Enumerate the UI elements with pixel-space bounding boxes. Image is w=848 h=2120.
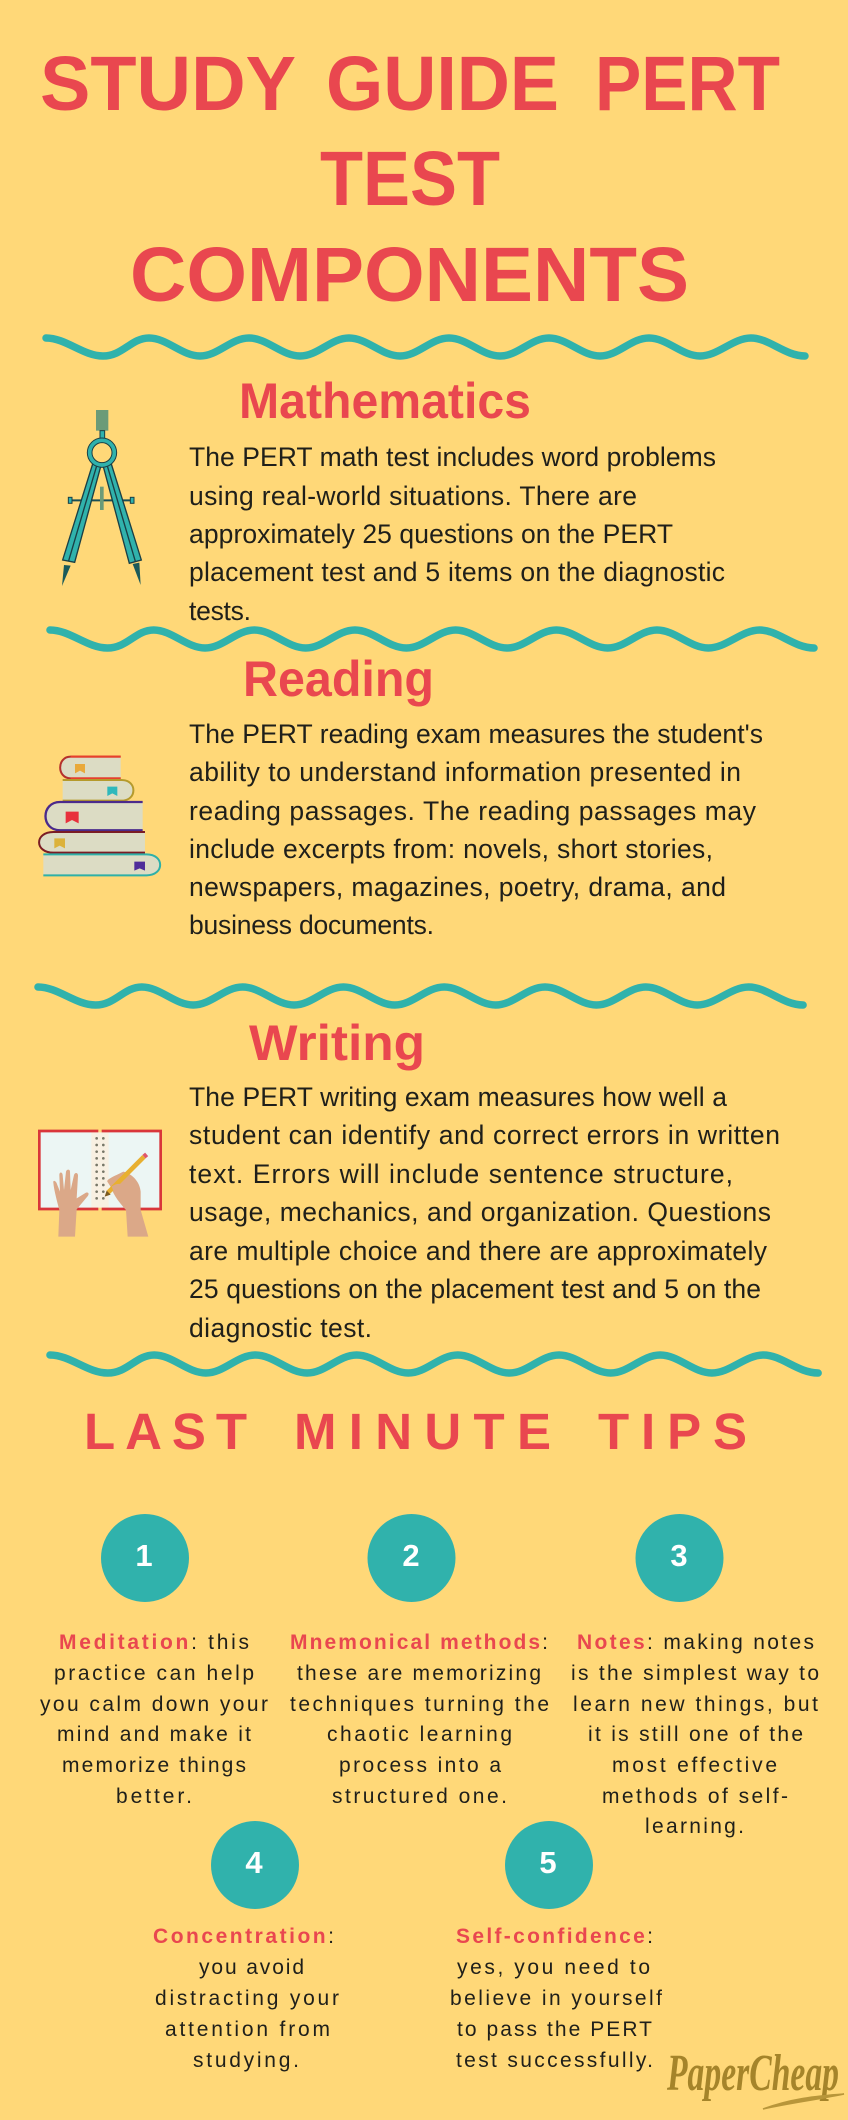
tip 4: concentration (153, 1821, 339, 2072)
text: reading description: newspapers, magazines, poetry, drama, and (189, 872, 726, 902)
number badge 4 (211, 1821, 299, 1909)
text: writing description: 25 questions on the placement test and 5 on the (189, 1274, 761, 1304)
text: mathematics description: placement test and 5 items on the diagnostic (189, 557, 725, 587)
heading: writing: Writing (249, 1015, 425, 1071)
text: reading description: The PERT reading exam measures the student's (189, 719, 763, 749)
tip 5 text: Self-confidence: (456, 1925, 653, 1948)
tip 4 text: attention from (165, 2018, 330, 2041)
number badge 2 (368, 1514, 456, 1602)
tip 2 text: process into a (339, 1754, 501, 1777)
title: STUDY (40, 41, 296, 127)
number badge 1 (101, 1514, 189, 1602)
wave divider 1 (46, 338, 805, 356)
tip 2: mnemonical methods (290, 1514, 549, 1808)
tip 3 text (571, 1631, 819, 1838)
tip 5 text: test successfully. (456, 2049, 653, 2072)
number badge 2: 2 (402, 1538, 420, 1573)
tip 4 text: distracting your (155, 1987, 339, 2010)
text: mathematics description: The PERT math test includes word problems (189, 442, 716, 472)
number badge 4: 4 (245, 1845, 263, 1880)
tip 1 text: better. (116, 1785, 192, 1808)
icon: stack of books (39, 757, 160, 875)
tip 5 text: to pass the PERT (457, 2018, 652, 2041)
panel: writing (39, 1015, 780, 1343)
tip 2 text: structured one. (332, 1785, 507, 1808)
icon: drawing compass (62, 410, 141, 586)
tip 3 text: methods of self- (602, 1785, 788, 1808)
heading: last minute tips (84, 1403, 747, 1460)
heading: last minute tips: TIPS (598, 1403, 747, 1460)
text: mathematics description: tests. (189, 596, 251, 626)
tip 5: self-confidence (450, 1821, 662, 2072)
tip 3 text: learn new things, but (573, 1693, 818, 1716)
tip 1 text (40, 1631, 268, 1808)
tip 2 text: chaotic learning (327, 1723, 512, 1746)
tip 4 text: you avoid (199, 1956, 304, 1979)
text: writing description: student can identify and correct errors in written (189, 1120, 780, 1150)
title: TEST (320, 136, 500, 222)
text: reading description: business documents. (189, 910, 434, 940)
text: reading description: ability to understand information presented in (189, 757, 741, 787)
number badge 1: 1 (135, 1538, 153, 1573)
title: GUIDE (326, 41, 559, 127)
tip 3 text: most effective (612, 1754, 777, 1777)
heading: reading: Reading (243, 651, 434, 707)
tip 4 text: Concentration: (153, 1925, 334, 1948)
number badge 3 (636, 1514, 724, 1602)
text: mathematics description: using real-world situations. There are (189, 481, 637, 511)
heading: last minute tips: LAST (84, 1403, 247, 1460)
text: writing description: diagnostic test. (189, 1313, 372, 1343)
tip 1 text: practice can help (54, 1662, 254, 1685)
tip 3 text: Notes: making notes (577, 1631, 814, 1654)
icon: notebook with hands (39, 1131, 161, 1237)
wave divider 2 (50, 630, 814, 648)
tip 1: meditation (40, 1514, 268, 1808)
heading: mathematics: Mathematics (239, 373, 531, 429)
tip 1 text: memorize things (62, 1754, 246, 1777)
panel: reading (39, 651, 763, 940)
text: writing description: are multiple choice and there are approximately (189, 1236, 768, 1266)
text: writing description: The PERT writing exam measures how well a (189, 1082, 727, 1112)
tip 5 text: believe in yourself (450, 1987, 662, 2010)
number badge 3: 3 (670, 1538, 688, 1573)
wave divider 3 (38, 987, 803, 1005)
tip 2 text (290, 1631, 549, 1808)
tip 3 text: it is still one of the (588, 1723, 803, 1746)
text: mathematics description: approximately 25 questions on the PERT (189, 519, 673, 549)
text: mathematics description (189, 442, 725, 626)
tip 5 text: yes, you need to (457, 1956, 650, 1979)
tip 5 text (450, 1925, 662, 2072)
title: PERT (595, 41, 780, 127)
tip 2 text: these are memorizing (297, 1662, 541, 1685)
panel: mathematics (62, 373, 725, 626)
heading: last minute tips: MINUTE (294, 1403, 551, 1460)
title: COMPONENTS (130, 232, 689, 318)
tip 4 text: studying. (193, 2049, 299, 2072)
tip 3 text: learning. (645, 1815, 744, 1838)
tip 1 text: you calm down your (40, 1693, 268, 1716)
tip 3 text: is the simplest way to (571, 1662, 819, 1685)
number badge 5: 5 (539, 1845, 557, 1880)
text: writing description: usage, mechanics, and organization. Questions (189, 1197, 771, 1227)
tip 1 text: mind and make it (57, 1723, 251, 1746)
title (40, 41, 780, 318)
tip 1 text: Meditation: this (59, 1631, 249, 1654)
wave divider 4 (50, 1355, 818, 1373)
tip 2 text: techniques turning the (290, 1693, 549, 1716)
number badge 5 (505, 1821, 593, 1909)
text: reading description (189, 719, 763, 940)
text: writing description: text. Errors will include sentence structure, (189, 1159, 733, 1189)
tip 3: notes (571, 1514, 819, 1838)
text: reading description: include excerpts from: novels, short stories, (189, 834, 713, 864)
text: reading description: reading passages. The reading passages may (189, 796, 757, 826)
tip 2 text: Mnemonical methods: (290, 1631, 548, 1654)
text: writing description (189, 1082, 780, 1343)
tip 4 text (153, 1925, 339, 2072)
